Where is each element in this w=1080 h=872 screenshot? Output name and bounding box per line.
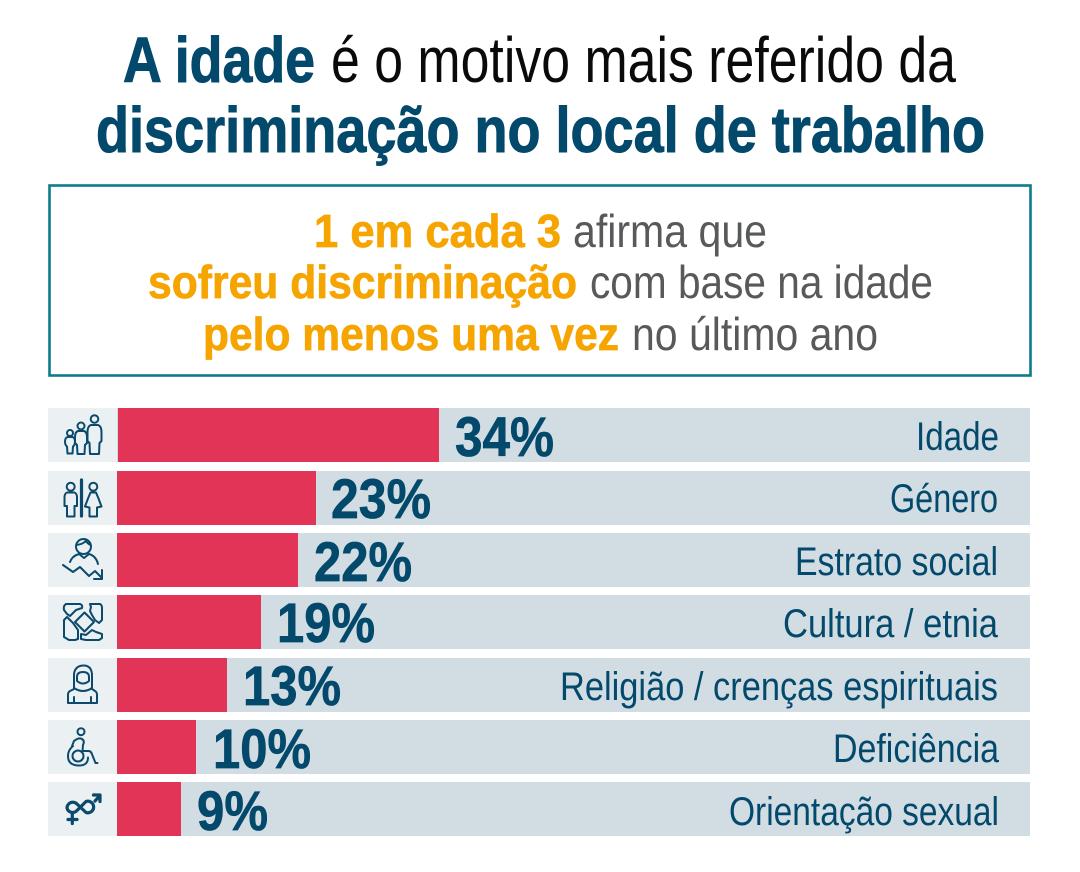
row: Religião 13%: 13%	[243, 654, 341, 717]
row: Estrato social 22%: 22%	[314, 530, 412, 593]
callout: 1 em cada 3	[50, 186, 1030, 376]
row: Género 23%	[48, 467, 1030, 530]
row: Deficiência 10%: Deficiência	[833, 727, 1000, 771]
title: A idade	[123, 24, 315, 96]
icon: gender orientation	[67, 795, 100, 824]
row: Estrato social 22%	[48, 530, 1030, 593]
row: Orientação sexual 9%: 9%	[197, 779, 268, 842]
row: Idade 34%: Idade	[916, 415, 999, 459]
row: Estrato social 22%: Estrato social	[795, 540, 998, 584]
callout: 1 em cada 3: sofreu discriminação	[148, 256, 577, 308]
title	[96, 24, 985, 166]
row: Deficiência 10%: 10%	[213, 717, 311, 780]
callout: 1 em cada 3: afirma que	[573, 205, 767, 257]
row: Orientação sexual 9%: Orientação sexual	[729, 790, 999, 834]
bar chart	[48, 405, 1030, 842]
row: Deficiência 10%	[48, 717, 1030, 780]
row: Género 23%: 23%	[331, 467, 431, 530]
icon: woman with headscarf	[68, 665, 97, 703]
row: Religião 13%	[48, 654, 1030, 717]
row: Cultura / etnia 19%	[48, 591, 1030, 654]
row: Género 23%: Género	[890, 477, 998, 521]
row: Idade 34%: 34%	[455, 405, 554, 468]
callout: 1 em cada 3: 1 em cada 3	[314, 205, 561, 257]
row: Orientação sexual 9%	[48, 779, 1030, 842]
row: Cultura / etnia 19%: 19%	[277, 591, 375, 654]
icon: family	[65, 415, 102, 454]
icon: gender symbols	[64, 480, 102, 516]
icon: linked hands	[64, 604, 102, 640]
callout: 1 em cada 3: pelo menos uma vez	[203, 308, 619, 360]
callout: 1 em cada 3: no último ano	[632, 308, 878, 360]
row: Religião 13%: Religião / crenças espirituais	[560, 665, 998, 709]
callout: 1 em cada 3: com base na idade	[590, 256, 933, 308]
row: Idade 34%	[48, 405, 1030, 468]
icon: wheelchair	[68, 728, 98, 766]
row: Cultura / etnia 19%: Cultura / etnia	[783, 602, 999, 646]
title: é o motivo mais referido da	[331, 24, 956, 96]
icon: person with falling arrow	[63, 539, 102, 579]
